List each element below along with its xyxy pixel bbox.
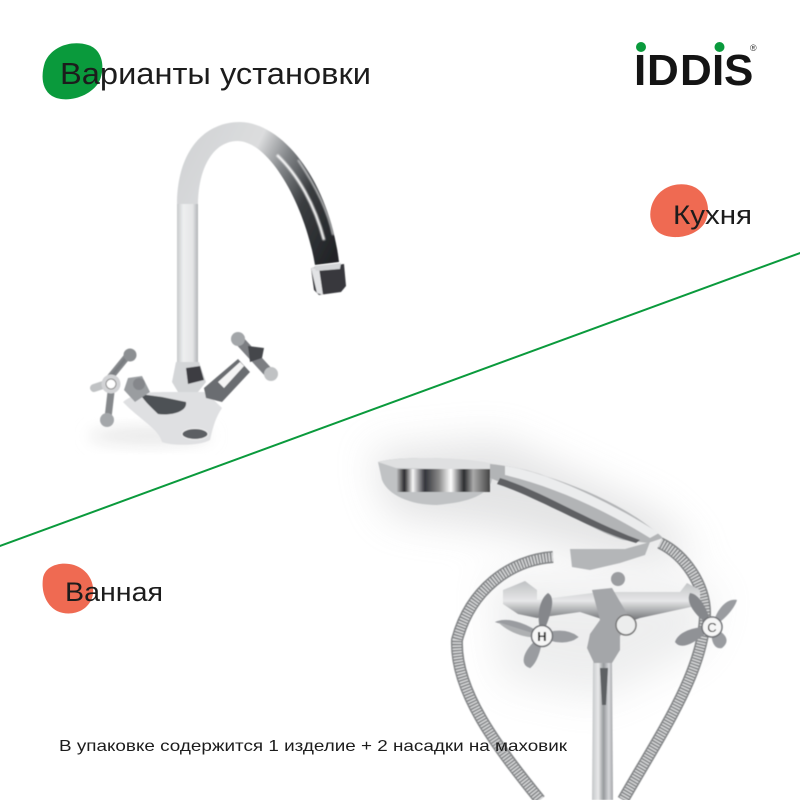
holder bracket <box>570 542 650 570</box>
title blob <box>43 43 102 99</box>
logo text: IDDIS <box>634 46 753 95</box>
spout highlights <box>277 155 333 240</box>
package note: В упаковке содержится 1 изделие + 2 насадки на маховик <box>59 738 568 755</box>
logo <box>634 42 757 95</box>
bath photo shadow <box>372 440 720 700</box>
label: bathroom <box>43 564 163 613</box>
right cross handle <box>675 593 737 648</box>
faucet shadow <box>88 428 212 444</box>
right cross handle: C <box>707 620 717 635</box>
right handle arm <box>204 359 250 402</box>
label: kitchen: Кухня <box>673 200 752 230</box>
right cross handle <box>231 332 278 381</box>
spout <box>592 662 613 800</box>
divider line <box>0 252 800 547</box>
left cross handle <box>498 593 577 667</box>
label: kitchen <box>650 184 752 237</box>
hose <box>457 543 705 800</box>
registered mark: ® <box>750 43 757 53</box>
faucet nozzle <box>311 264 346 295</box>
label: bathroom: Ванная <box>65 577 163 607</box>
diverter knob <box>616 615 636 635</box>
faucet body <box>123 392 222 445</box>
bath faucet photo <box>378 458 737 800</box>
wall bar <box>503 581 700 625</box>
left handle arm <box>124 376 150 402</box>
kitchen faucet photo <box>88 122 346 445</box>
faucet spout <box>177 122 339 265</box>
shower handle <box>490 464 663 543</box>
shower head <box>378 458 492 505</box>
title <box>43 43 371 99</box>
left cross handle <box>94 348 145 427</box>
faucet neck <box>177 204 198 369</box>
left cross handle: H <box>537 629 547 644</box>
faucet collar <box>172 362 206 392</box>
logo dots <box>636 42 724 52</box>
center valve <box>587 588 632 663</box>
title: Варианты установки <box>60 56 371 91</box>
